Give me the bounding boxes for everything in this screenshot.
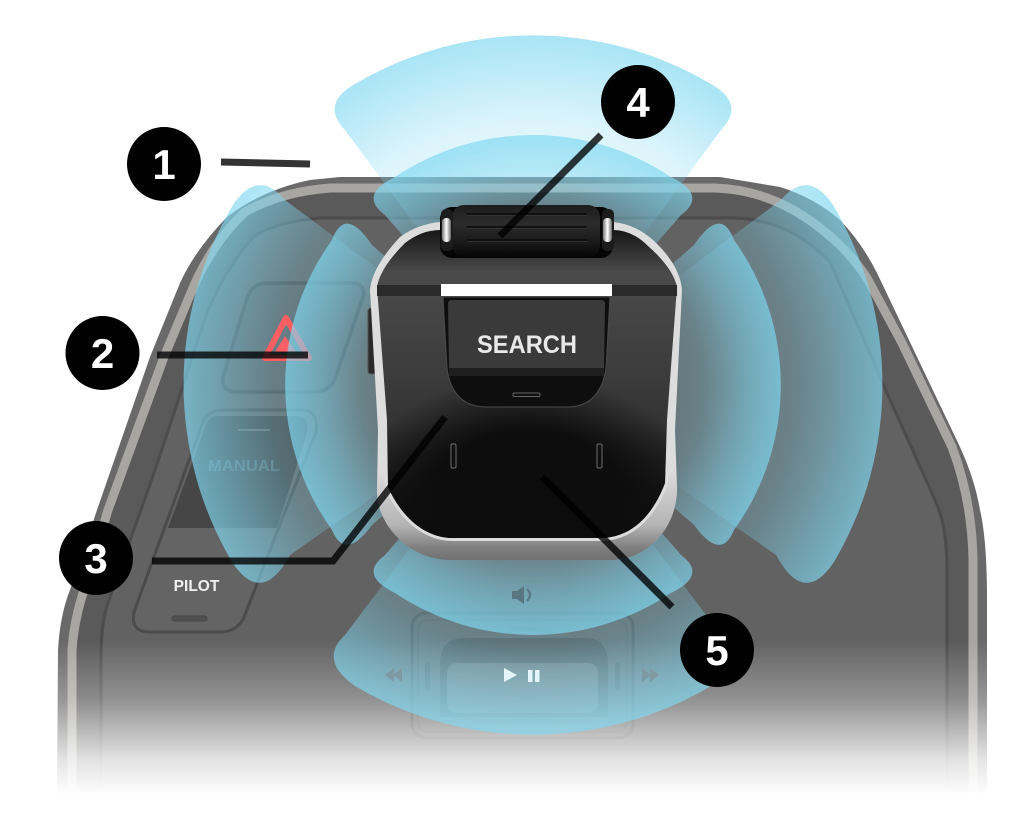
screen slot <box>513 393 540 396</box>
outer wedge: top <box>335 35 731 385</box>
number badge 5: 5 <box>705 627 729 674</box>
inner wedge: left <box>285 224 533 545</box>
hazard button <box>223 283 364 392</box>
number badge 1: 1 <box>152 141 176 188</box>
leader line 4 <box>500 135 601 236</box>
manual label: MANUAL <box>208 458 280 475</box>
inner wedge: bottom <box>374 385 692 635</box>
manual / pilot button <box>133 410 317 632</box>
pilot slot <box>172 616 207 621</box>
number badge 2: 2 <box>91 330 114 377</box>
number badge 5 <box>680 613 754 687</box>
leader line 2 <box>157 352 308 358</box>
handset face <box>377 230 677 538</box>
pilot label: PILOT <box>174 578 220 595</box>
silver shell <box>370 222 682 560</box>
pinholes <box>451 444 456 468</box>
inner signal wedges <box>285 135 781 635</box>
leader line 3 <box>152 417 445 561</box>
icon: fast forward <box>642 668 659 682</box>
bottom media button <box>412 613 633 738</box>
icon: rewind <box>385 668 402 682</box>
outer wedge: left <box>184 185 533 583</box>
icon: speaker <box>512 586 530 604</box>
outer wedge: right <box>533 185 882 583</box>
outer signal wedges <box>184 35 882 735</box>
bottom fade to white <box>0 640 1023 835</box>
central handset <box>368 205 682 560</box>
console body <box>57 177 987 800</box>
outer wedge: bottom <box>334 385 732 735</box>
number badge 3 <box>59 521 133 595</box>
roller caps <box>441 209 453 251</box>
icon: pause <box>528 670 540 682</box>
inner wedge: top <box>374 135 692 385</box>
search label: SEARCH <box>477 331 577 359</box>
inner wedge: right <box>533 224 781 545</box>
number badge 4 <box>601 65 675 139</box>
icon: play <box>504 668 517 682</box>
white bar <box>441 284 612 296</box>
roller wheel <box>440 205 614 258</box>
leader line 1 <box>221 162 310 164</box>
number badge 3: 3 <box>84 535 108 582</box>
side band <box>377 285 441 296</box>
number badge 2 <box>66 316 140 390</box>
search screen <box>443 297 610 407</box>
icon: hazard triangle <box>265 318 309 358</box>
number badge 1 <box>127 127 201 201</box>
leader line 5 <box>542 477 672 607</box>
face shadow <box>387 397 666 538</box>
side button <box>368 308 376 374</box>
number badge 4: 4 <box>626 79 650 126</box>
